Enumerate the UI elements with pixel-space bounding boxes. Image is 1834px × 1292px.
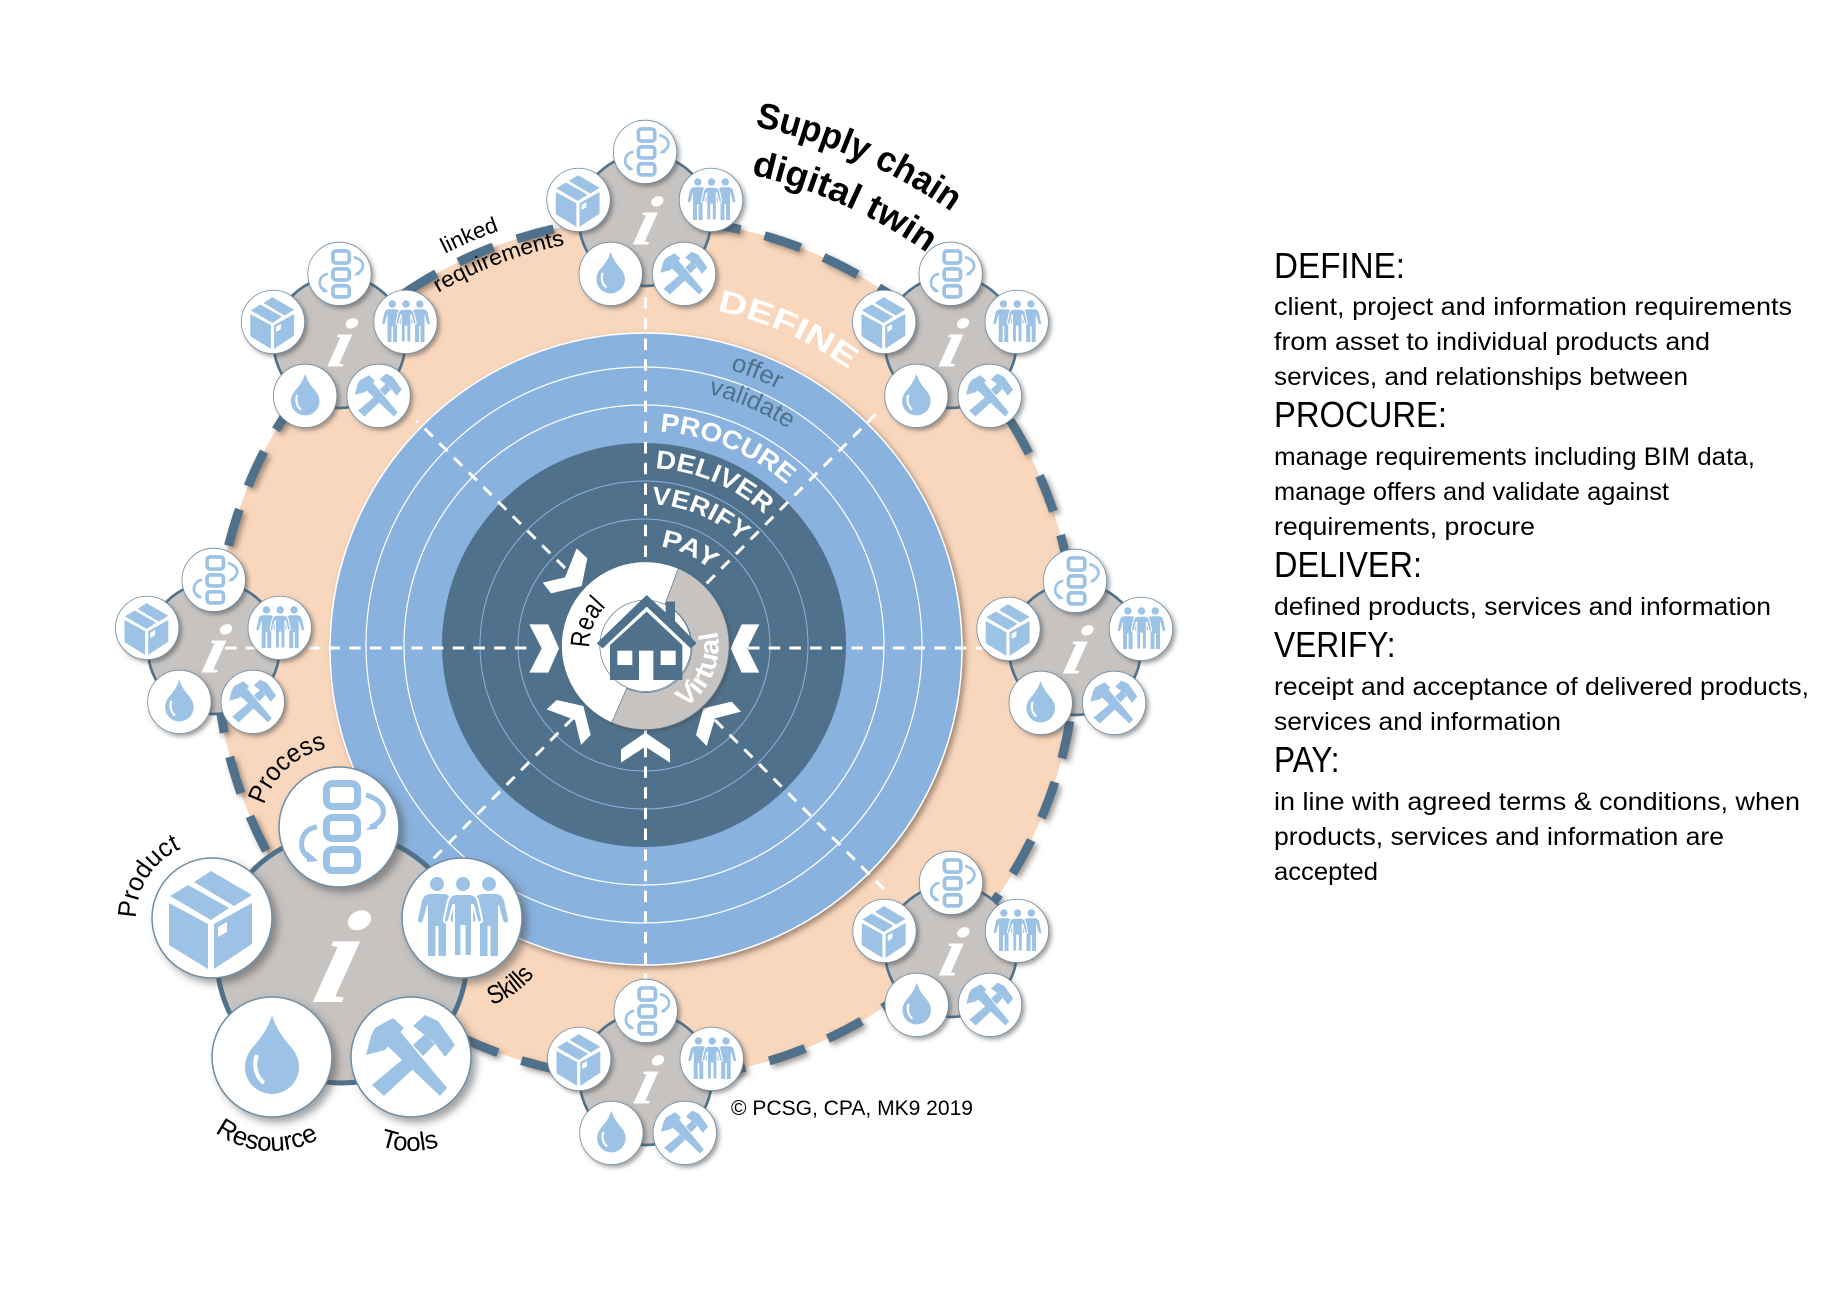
text block: DELIVER: defined products, services and information <box>1274 593 1771 621</box>
icon: house <box>597 595 697 681</box>
icon: product <box>152 858 272 978</box>
satellite: upper left <box>241 242 437 428</box>
chevron arrows <box>529 548 759 763</box>
label: DELIVER: DELIVER <box>657 450 773 514</box>
icon: process <box>182 548 245 612</box>
icon: product <box>977 597 1040 661</box>
icon: resource <box>580 1101 643 1165</box>
icon: product <box>115 596 179 660</box>
icon: resource <box>148 670 211 734</box>
text block: PROCURE: manage requirements including BIM data, <box>1274 443 1755 471</box>
label: PROCURE: PROCURE <box>662 414 797 484</box>
icon: resource <box>579 242 642 306</box>
satellite: upper left: i <box>321 305 363 382</box>
icon: tools <box>652 242 716 306</box>
satellite: upper right: i <box>933 305 974 382</box>
label: Process: Process <box>248 736 325 803</box>
icon: tools <box>1082 671 1146 735</box>
icon: skills <box>374 290 437 354</box>
label: DEFINE: DEFINE <box>719 290 859 369</box>
text block: DEFINE: services, and relationships between <box>1274 363 1688 391</box>
satellite: lower right: i <box>933 914 974 991</box>
icon: process <box>613 120 677 184</box>
label: Tools: Tools <box>384 1128 438 1152</box>
text block: DEFINE: DEFINE: <box>1274 245 1405 286</box>
icon: resource <box>885 973 948 1037</box>
icon: skills <box>248 596 311 660</box>
satellite: top: i <box>627 183 668 260</box>
text block: PROCURE: requirements, procure <box>1274 513 1535 541</box>
label: validate: validate <box>712 381 793 426</box>
icon: resource <box>274 364 337 428</box>
text block: PROCURE <box>1274 394 1755 541</box>
icon: resource <box>212 997 332 1117</box>
icon: skills <box>985 899 1049 963</box>
label: PAY: PAY <box>662 530 720 565</box>
text block: VERIFY: receipt and acceptance of delivered products, <box>1274 673 1809 701</box>
hub: real and virtual <box>562 562 733 734</box>
satellite: upper right <box>852 242 1048 428</box>
text block: PAY: in line with agreed terms & conditions, when <box>1274 788 1800 816</box>
text block: DEFINE: from asset to individual products and <box>1274 328 1710 356</box>
title line 1: Supply chain <box>757 104 958 210</box>
icon: tools <box>958 973 1022 1037</box>
text block: PROCURE: PROCURE: <box>1274 394 1447 435</box>
copyright: © PCSG, CPA, MK9 2019 <box>731 1097 973 1120</box>
panel: define ring <box>216 219 1076 1079</box>
label: Virtual: Virtual <box>674 633 719 704</box>
icon: product <box>547 168 610 232</box>
text block: PAY: PAY: <box>1274 739 1340 780</box>
panel: delivery disc <box>442 443 846 847</box>
title line 2: digital twin <box>754 152 934 252</box>
satellite: bottom <box>547 979 743 1165</box>
icon: tools <box>653 1101 716 1165</box>
icon: skills <box>985 290 1048 354</box>
text block: DELIVER: DELIVER: <box>1274 544 1422 585</box>
satellite: left <box>115 548 311 734</box>
label: linked: linked <box>439 216 498 254</box>
icon: tools <box>958 364 1021 428</box>
label: Skills: Skills <box>488 968 532 1004</box>
icon: product <box>852 290 916 354</box>
satellite: large key <box>152 767 522 1117</box>
icon: skills <box>1109 597 1173 661</box>
icon: tools <box>351 997 471 1117</box>
label: VERIFY: VERIFY <box>654 486 752 537</box>
icon: process <box>308 242 371 306</box>
icon: tools <box>347 364 410 428</box>
label: requirements: requirements <box>434 234 564 292</box>
icon: tools <box>221 670 284 734</box>
icon: product <box>547 1027 611 1091</box>
icon: product <box>241 290 305 354</box>
label: Real: Real <box>570 594 605 646</box>
text block: VERIFY: services and information <box>1274 708 1561 736</box>
satellite: large key: i <box>302 886 380 1031</box>
satellite: bottom: i <box>628 1042 669 1119</box>
icon: skills <box>402 858 522 978</box>
text block: VERIFY: VERIFY: <box>1274 624 1396 665</box>
icon: skills <box>680 1027 743 1091</box>
icon: resource <box>885 364 948 428</box>
satellite: lower right <box>853 851 1049 1037</box>
icon: product <box>853 899 916 963</box>
icon: process <box>919 242 982 306</box>
label: Product: Product <box>118 835 180 916</box>
satellite: top <box>547 120 743 306</box>
satellite: left: i <box>196 611 237 688</box>
text block: DEFINE: client, project and information requirements <box>1274 293 1792 321</box>
icon: process <box>614 979 677 1043</box>
icon: process <box>1043 549 1107 613</box>
icon: process <box>279 767 399 887</box>
icon: process <box>919 851 983 915</box>
dashed outer boundary <box>216 219 1076 1079</box>
dashed spokes <box>225 288 985 985</box>
text block: PROCURE: manage offers and validate against <box>1274 478 1669 506</box>
label: Resource: Resource <box>216 1118 316 1152</box>
panel: procure disc <box>330 333 962 965</box>
satellite: right: i <box>1057 612 1098 689</box>
icon: skills <box>679 168 743 232</box>
text block: VERIFY <box>1274 624 1809 736</box>
text block: DELIVER <box>1274 544 1771 621</box>
text block: DEFINE <box>1274 245 1792 391</box>
text block: PAY: accepted <box>1274 858 1378 886</box>
label: offer: offer <box>732 358 784 388</box>
text block: PAY: products, services and information are <box>1274 823 1724 851</box>
satellite: right <box>977 549 1173 735</box>
icon: resource <box>1009 671 1072 735</box>
text block: PAY <box>1274 739 1800 886</box>
